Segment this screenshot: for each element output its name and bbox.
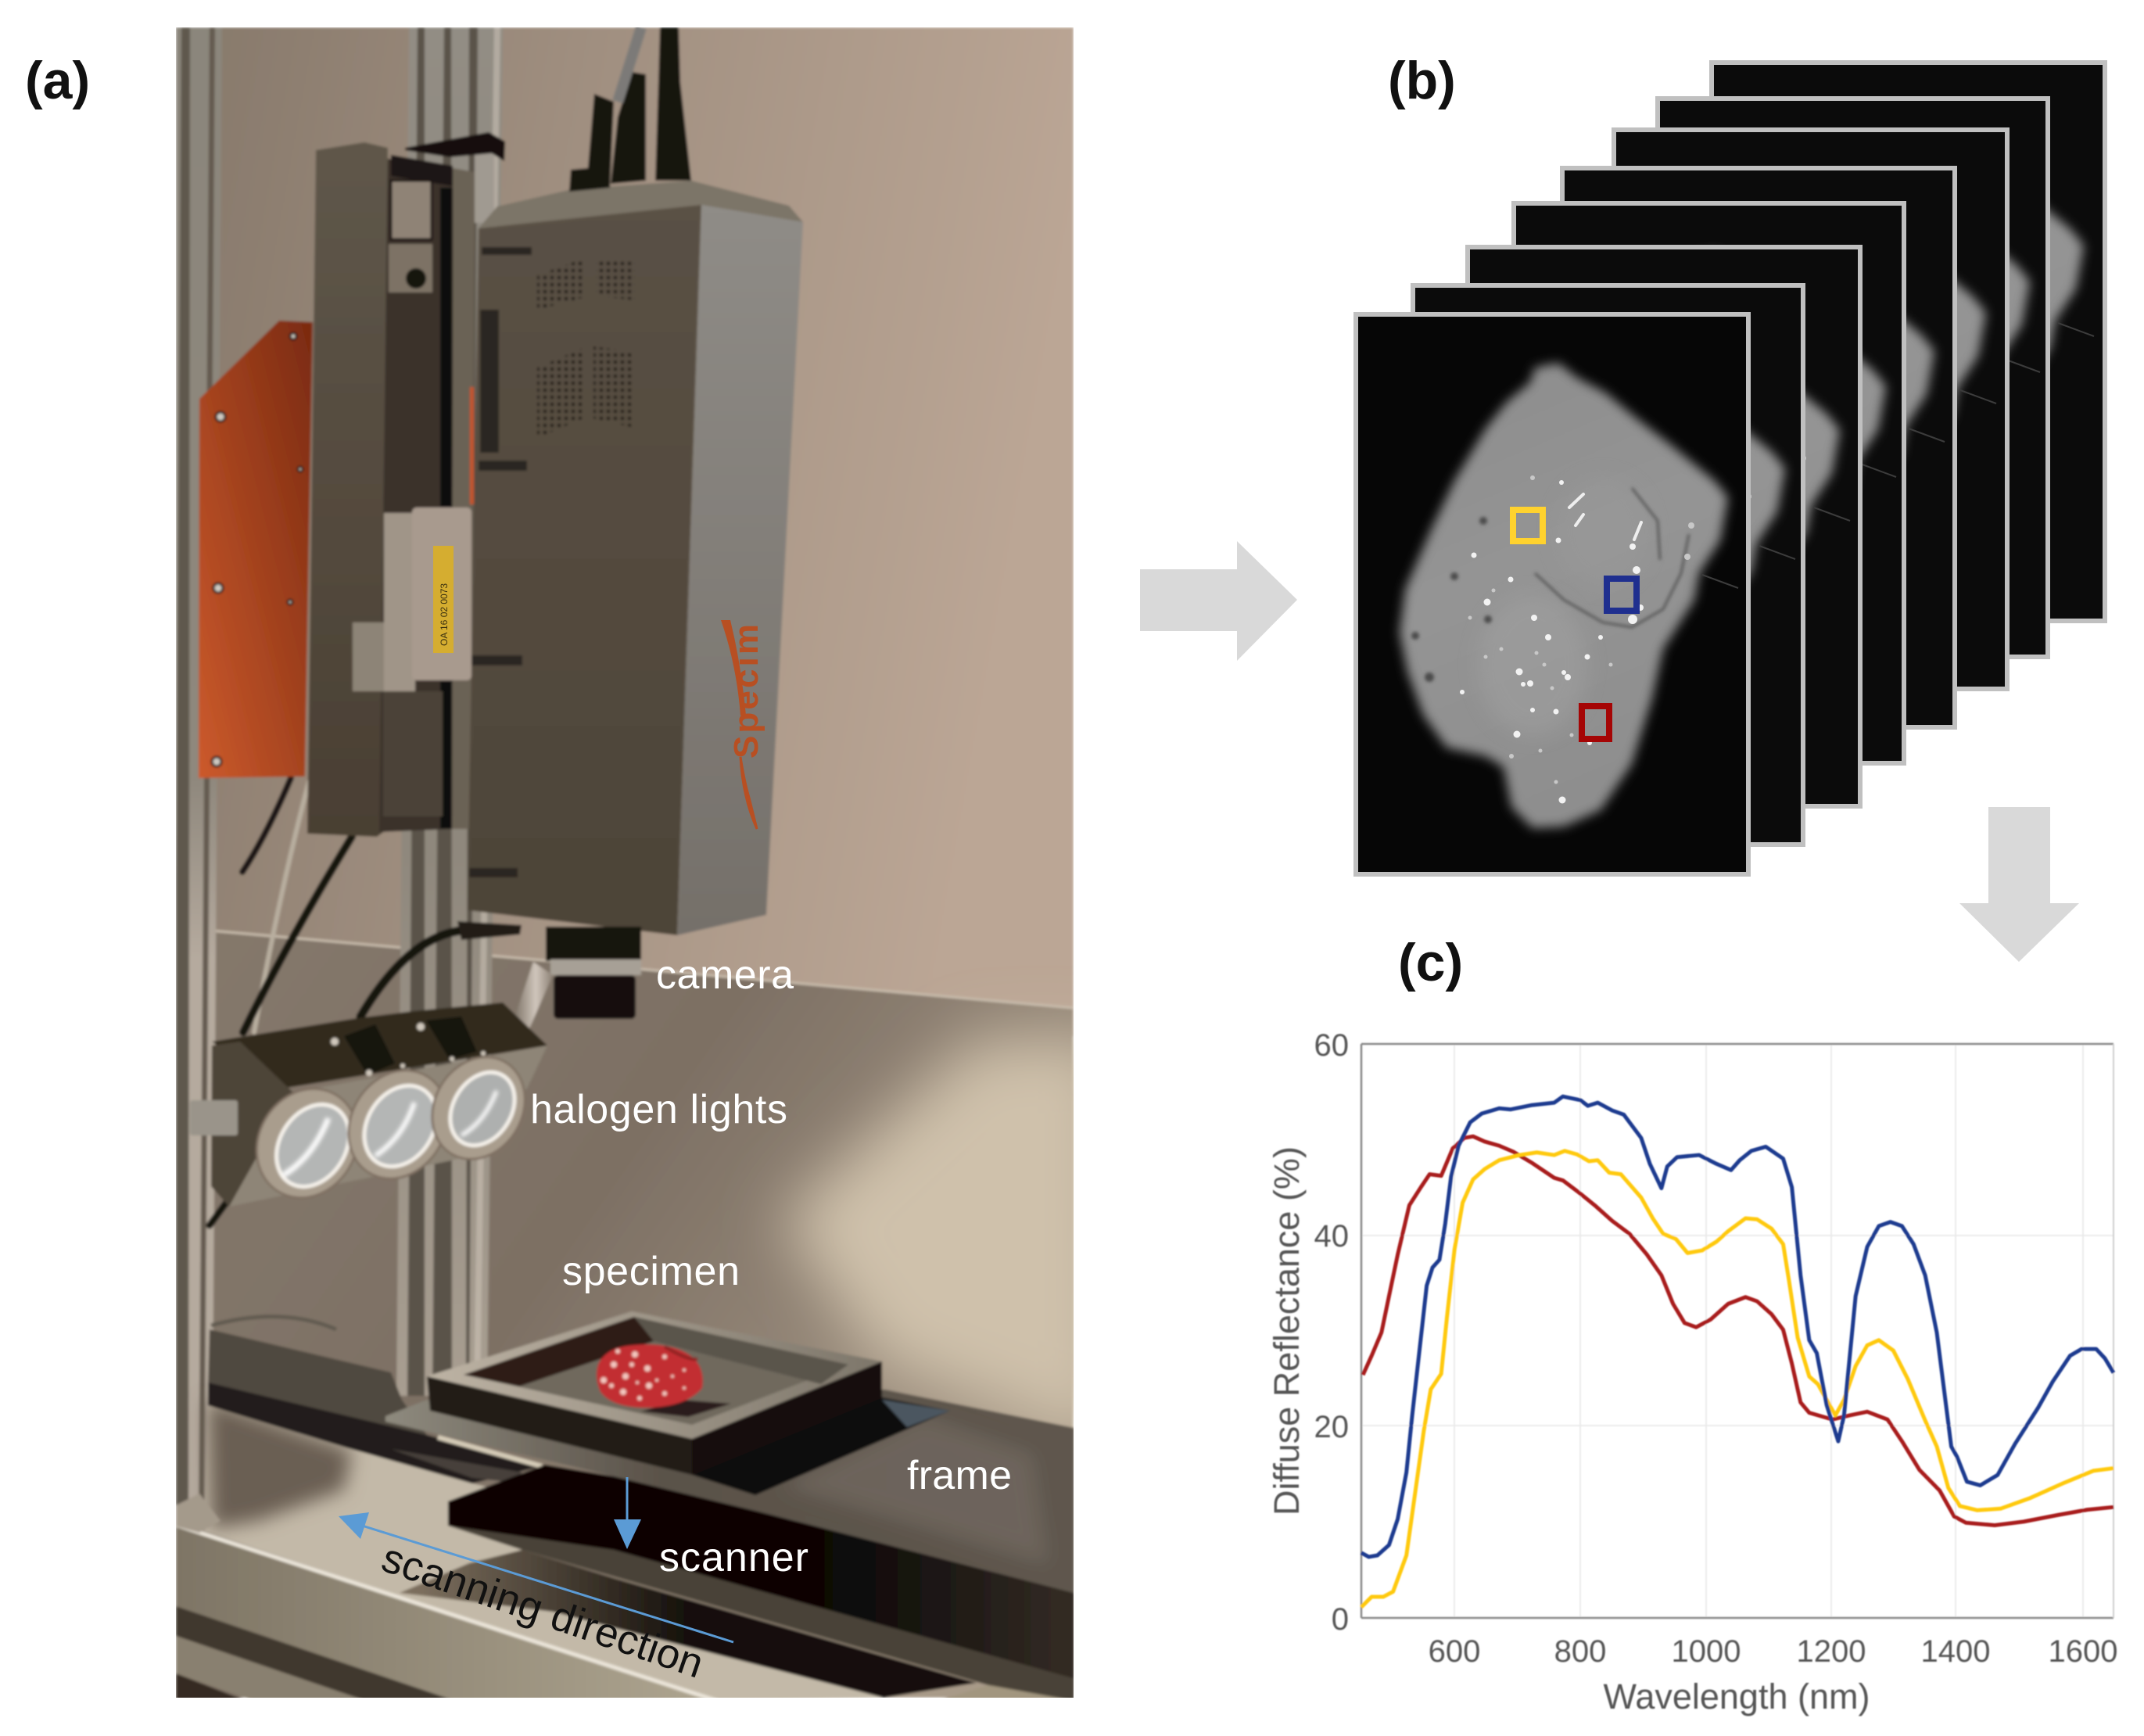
x tick labels [1429, 1634, 2117, 1669]
vents [537, 258, 635, 438]
frame plate [385, 1390, 1074, 1593]
camera lens [546, 927, 641, 1019]
x tick labels: 1200 [1797, 1634, 1866, 1669]
frame 5 [1560, 166, 1957, 730]
label: scanner: scanner [659, 1535, 808, 1580]
label: halogen lights: halogen lights [530, 1087, 787, 1132]
frame 8 [1709, 60, 2107, 623]
specimen shadow [641, 1400, 731, 1417]
x tick labels: 1000 [1672, 1634, 1741, 1669]
arrow: scanning direction [339, 1512, 733, 1642]
blue glint [882, 1400, 950, 1427]
rear machine arc [211, 1317, 336, 1329]
y tick labels: 0 [1332, 1602, 1349, 1637]
panel a: photograph of the imaging setup [176, 27, 1110, 1701]
rail foot [176, 1494, 220, 1533]
column right rail [452, 168, 475, 829]
silver bracket [384, 513, 415, 691]
cable wedge [457, 921, 522, 940]
heading (a): (a) [25, 51, 90, 110]
middle rail [396, 27, 503, 1396]
camera face slots [469, 247, 532, 877]
grey band [448, 1526, 1074, 1701]
strap and pole [405, 132, 505, 223]
black scanner slab [448, 1465, 1074, 1679]
pale strip [438, 1437, 542, 1466]
frame 2 [1411, 283, 1805, 847]
curve: blue [1361, 1096, 2114, 1557]
label: frame: frame [907, 1453, 1012, 1498]
wall light cone [782, 1040, 1110, 1447]
y axis title: Diffuse Reflectance (%) [1267, 1146, 1307, 1515]
ROI red [1582, 706, 1609, 739]
x tick labels: 800 [1554, 1634, 1606, 1669]
base rail [208, 1383, 542, 1483]
column channel [379, 159, 453, 832]
x tick labels: 1600 [2049, 1634, 2117, 1669]
y tick labels: 40 [1314, 1219, 1349, 1254]
connectors [331, 1017, 486, 1076]
bottom light strip [176, 1636, 366, 1701]
label: scanning direction: scanning direction [376, 1535, 709, 1688]
light box front [229, 1046, 547, 1207]
x tick labels: 1400 [1921, 1634, 1990, 1669]
heading (c): (c) [1398, 933, 1463, 992]
light connector tube [511, 962, 553, 1032]
tray [427, 1311, 882, 1475]
floor edge line [176, 1525, 717, 1701]
arrow: right [1140, 541, 1297, 661]
camera right face [677, 205, 803, 935]
frame 4 [1511, 201, 1906, 766]
cables top [569, 27, 691, 192]
ROI blue [1607, 579, 1637, 611]
yellow sensor label: OA 16 02 0073 [439, 583, 450, 646]
curve: red [1363, 1136, 2114, 1526]
label: camera: camera [656, 952, 794, 998]
frame 3 [1465, 245, 1863, 809]
lit floor [204, 1405, 977, 1701]
frame 6 [1612, 127, 2010, 691]
orange strip [470, 387, 474, 504]
x axis title: Wavelength (nm) [1604, 1677, 1870, 1716]
orange mounting plate [199, 321, 313, 778]
tray shadow [692, 1397, 950, 1495]
axes [1361, 1044, 2114, 1618]
y tick labels: 20 [1314, 1410, 1349, 1444]
label: specimen: specimen [562, 1249, 740, 1294]
rail speckle [391, 1449, 522, 1482]
heading (b): (b) [1388, 51, 1456, 110]
rear machine block [208, 1329, 427, 1435]
camera lid [479, 181, 803, 228]
tan corner [938, 1685, 1074, 1701]
wall lower [176, 927, 1073, 1698]
grey cable [618, 27, 641, 102]
light box side [211, 1042, 293, 1207]
light box top [212, 1003, 547, 1089]
frame lighter patch [782, 1415, 1048, 1564]
floor shadow right [400, 1550, 977, 1698]
camera logo: Specim [727, 624, 765, 759]
yellow sensor label [433, 546, 454, 653]
screws [212, 333, 303, 766]
knob [406, 268, 426, 289]
curve: yellow [1361, 1151, 2114, 1607]
top bar [391, 155, 453, 186]
panel c: reflectance chart [1267, 1028, 2117, 1716]
column black slot [440, 188, 454, 829]
below strip [176, 1525, 717, 1701]
panel b: hyperspectral image stack [1353, 60, 2107, 877]
grid [1361, 1044, 2114, 1618]
camera left face [468, 205, 701, 935]
y tick labels: 60 [1314, 1028, 1349, 1063]
lower column window [383, 691, 443, 816]
bottom corner [176, 1673, 246, 1701]
scanner column [307, 142, 388, 837]
ROI yellow [1513, 510, 1543, 541]
left rail [176, 27, 222, 1529]
lamps [237, 1040, 543, 1216]
bottom dark band [176, 1606, 455, 1701]
y tick labels [1314, 1028, 1349, 1637]
floor shadow left [208, 1400, 352, 1529]
wall upper [176, 27, 1074, 1036]
window lower [389, 244, 432, 292]
frame 1 with specimen [1353, 312, 1751, 877]
clamp [190, 1100, 238, 1135]
column clamp [353, 622, 384, 691]
window [391, 181, 432, 239]
frame 7 [1655, 96, 2050, 659]
x tick labels: 600 [1429, 1634, 1480, 1669]
right axis light [2113, 1044, 2114, 1618]
specimen [597, 1344, 703, 1408]
arrow: down [1959, 807, 2079, 962]
arrow: scanner pointer [614, 1477, 641, 1549]
rear cables [210, 778, 461, 1225]
pale sensor block [412, 508, 471, 680]
ledge line [176, 927, 1073, 1008]
camera logo [721, 620, 765, 829]
